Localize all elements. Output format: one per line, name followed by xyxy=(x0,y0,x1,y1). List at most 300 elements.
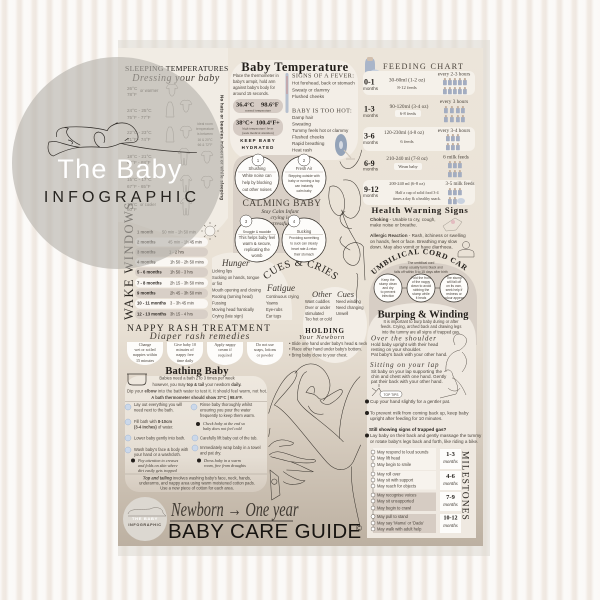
calming step 2: calm baby xyxy=(296,189,312,193)
temperature labels: 22°C - 23°C xyxy=(127,130,152,135)
umbilical circles: redness or xyxy=(446,292,463,296)
tips list: upright after feeding for 10 minutes. xyxy=(370,416,443,421)
calming step 1 xyxy=(235,154,279,200)
calming script note xyxy=(261,208,299,227)
tips list: Lay baby on their back and gently massage the tummy xyxy=(370,433,482,438)
fatigue cues xyxy=(266,283,299,318)
holding heading: HOLDING xyxy=(305,327,345,335)
row: 0-1 months: 8-12 feeds xyxy=(397,85,417,90)
bathing steps left: Pay attention to creases xyxy=(137,458,179,463)
high temperature pill: 38°C+ xyxy=(236,120,254,126)
temperature labels: 71°F - 74°F xyxy=(127,137,151,142)
umbilical circles: The stump xyxy=(446,276,462,280)
umbilical circles: Keep the xyxy=(381,278,395,282)
illustration: sleeping baby line drawing xyxy=(48,123,197,156)
milestone rows: May reach for objects xyxy=(377,484,416,488)
milestone rows: May sit with support xyxy=(377,478,414,482)
other cues: Need changing xyxy=(336,305,364,310)
logo badge: INFOGRAPHIC xyxy=(128,523,162,527)
wake window rows: 12 - 13 months xyxy=(137,312,167,316)
allergic reaction text: down. May also vomit or have diarrhoea. xyxy=(370,244,453,250)
nappy heading: NAPPY RASH TREATMENT xyxy=(127,323,271,334)
sleeping heading: SLEEPING TEMPERATURES xyxy=(125,64,229,73)
wake window rows: 1 month xyxy=(137,230,154,234)
temperature labels: 60°F xyxy=(127,207,137,212)
calming step 2: can instantly xyxy=(295,184,314,188)
bathing steps right: frequently to keep them warm. xyxy=(200,413,255,418)
milestone rows: May pull to stand xyxy=(377,514,409,519)
baby is too hot list: Sweating xyxy=(292,122,311,126)
nappy tip 3: required xyxy=(218,352,232,358)
icon: parent burping baby on shoulder xyxy=(446,334,466,372)
row: 3-6 months: every 3-4 hours xyxy=(438,128,470,134)
milestone rows: May recognise voices xyxy=(377,492,416,498)
wake window rows: 1 - 2 hrs xyxy=(169,250,184,254)
umbilical circles: seek help if xyxy=(446,288,462,292)
nappy tip 2: minutes of xyxy=(176,347,194,352)
newborn to one year script: Newborn → One year xyxy=(170,498,299,521)
umbilical circles: to prevent xyxy=(381,290,395,294)
baby is too hot list: Heat rash xyxy=(292,148,312,152)
icon: baby sitting on lap xyxy=(440,370,466,398)
row: 9-12 months: Half a cup of solid food 3-4 xyxy=(395,191,439,195)
panel: burping and winding xyxy=(365,303,482,538)
milestone month cards: 4-6 xyxy=(446,473,456,480)
panel: cues and cries xyxy=(212,252,367,363)
over the shoulder xyxy=(371,334,447,357)
bathing steps right: and pat dry. xyxy=(200,450,221,456)
calming heading: CALMING BABY xyxy=(242,199,322,209)
over the shoulder: Hold baby upright with their head xyxy=(371,342,439,347)
bathing steps right: ensuring you pour the water xyxy=(200,408,251,412)
panel: calming baby xyxy=(233,154,326,262)
hunger cues: Fussing xyxy=(212,300,227,306)
signs of a fever list: Sweaty or clammy xyxy=(292,88,330,92)
milestone rows: May walk with adult help xyxy=(377,526,422,532)
umbilical circles: of the nappy xyxy=(412,280,430,284)
wake window rows: 9 months xyxy=(137,290,156,296)
dressing script: Dressing your baby xyxy=(131,73,220,84)
thermometer instructions: Place the thermometer in xyxy=(233,73,279,78)
nappy tip 4 xyxy=(247,342,283,365)
row: 0-1 months: 30-60ml (1-2 oz) xyxy=(389,76,425,84)
bathing introduction: Babies need a bath 2 to 3 times per week xyxy=(159,376,236,380)
row: 3-6 months: months xyxy=(363,140,379,145)
calming step 4: Providing something xyxy=(289,236,319,240)
icon: baby choking xyxy=(443,218,462,231)
signs of a fever list: Flushed cheeks xyxy=(292,94,325,99)
fatigue cues: Yawns xyxy=(266,300,278,306)
wake window rows: 2h 15 - 3h 50 mins xyxy=(170,280,204,286)
calming step 2: Stepping outside with xyxy=(288,174,320,178)
calming step 2 xyxy=(282,154,326,200)
calming step 3: 3 xyxy=(245,219,248,224)
holding list: • Slide one hand under baby's head & neck. xyxy=(289,341,368,346)
calming step 4: Sucking xyxy=(297,229,312,234)
baby is too hot list: Tummy feels hot or clammy xyxy=(292,128,349,133)
milestone month cards: 10-12 xyxy=(444,516,458,522)
tips list: Cup your hand slightly for a gentler pat. xyxy=(370,399,450,404)
signs of a fever list xyxy=(292,72,355,99)
calming step 2: Fresh Air xyxy=(296,166,313,171)
row: 1-3 months: months xyxy=(363,113,379,118)
umbilical intro: The umbilical cord xyxy=(408,261,435,265)
row: 9-12 months: months xyxy=(363,193,379,198)
row: 1-3 months: 1-3 xyxy=(364,104,375,114)
choking text xyxy=(370,217,436,228)
panel: umbilical cord care xyxy=(369,249,477,345)
hunger cues: Licking lips xyxy=(212,268,232,274)
bathing steps right: Dress baby in a warm xyxy=(203,458,241,463)
icon: sun xyxy=(201,222,219,240)
bathing steps right: Rinse baby thoroughly whilst xyxy=(200,402,253,407)
keep baby hydrated: KEEP BABY xyxy=(240,138,276,143)
milestone month cards: months xyxy=(443,503,458,508)
holding list: • Bring baby close to your chest. xyxy=(289,352,348,358)
temperature labels: 18°C - 21°C xyxy=(127,154,152,159)
temperature labels: 67°F - 65°F xyxy=(127,184,151,189)
fatigue cues: Ear tugs xyxy=(266,314,281,318)
burping intro: feeds. Crying, arched back and drawing legs xyxy=(381,324,461,329)
milestone rows: May respond to loud sounds xyxy=(377,450,428,454)
panel: baby temperature xyxy=(230,60,358,160)
nappy tip 1: 15 minutes xyxy=(136,358,154,363)
temperature labels: 24°C - 25°C xyxy=(127,108,152,113)
hunger cues: Mouth opening and closing xyxy=(212,288,262,292)
wake window rows: 2h 45 - 3h 50 min xyxy=(170,290,203,296)
wake window rows: 7 - 8 months xyxy=(137,280,162,286)
bathing steps left: (3-4 inches) of water. xyxy=(134,424,173,430)
panel: nappy rash treatment xyxy=(127,323,283,365)
ideal room temperature note: ideal room xyxy=(197,122,213,126)
tips list xyxy=(365,399,482,444)
sitting on your lap: chin and chest with one hand. Gently xyxy=(371,374,447,379)
over the shoulder: Pat baby's back with your other hand. xyxy=(371,352,447,357)
wake window rows: 50 min - 1h 50 min xyxy=(162,230,197,234)
umbilical circles: odour appear xyxy=(444,296,465,300)
milestone month cards: months xyxy=(443,482,458,487)
burping heading: Burping & Winding xyxy=(378,310,469,320)
umbilical circles: and dry xyxy=(382,286,394,290)
wake window rows: 5 - 6 months xyxy=(137,270,162,274)
temperature labels: 64°F - 68°F xyxy=(127,160,151,165)
thermometer instructions: around 15 seconds. xyxy=(233,91,269,96)
choking text: Choking - Unable to cry, cough, xyxy=(370,217,436,222)
panel: wake windows xyxy=(122,201,219,320)
temperature labels: or cooler xyxy=(140,202,157,207)
umbilical circles: stump while xyxy=(412,292,430,296)
normal temperature pill xyxy=(233,99,283,113)
other cues: Need winding xyxy=(336,299,362,304)
wake window rows: 3h 15 - 4 hrs xyxy=(170,312,193,316)
wake window rows xyxy=(135,230,208,319)
wake window rows: 3 months xyxy=(137,250,156,254)
umbilical circles: on its own, xyxy=(446,284,462,288)
guide title xyxy=(168,498,362,543)
wake window rows: 10 - 11 months xyxy=(137,300,167,306)
milestone rows: May begin to smile xyxy=(377,462,412,467)
row: 9-12 months xyxy=(363,180,475,205)
bathing steps left xyxy=(125,402,189,473)
umbilical circles: will fall off xyxy=(447,280,461,284)
icon: doctor xyxy=(458,242,474,257)
ideal room temperature note: 66 & 72°F xyxy=(198,143,212,147)
icon: fan xyxy=(335,134,355,159)
thermometer instructions xyxy=(233,73,279,96)
bathing steps left: your hand or a washcloth. xyxy=(134,452,181,457)
row: 9-12 months: 200-240 ml (6-8 oz) xyxy=(389,181,425,186)
panel: sleeping temperatures xyxy=(118,48,229,238)
wake window rows: 4 months xyxy=(137,260,156,264)
baby is too hot list: BABY IS TOO HOT: xyxy=(292,108,352,114)
umbilical circles: Fold the front xyxy=(411,276,431,280)
burping intro xyxy=(381,319,461,334)
bathing introduction: Dip your elbow into the bath water to test it. It should feel warm, not hot. xyxy=(127,388,267,394)
top and tailing note: Top and tailing involves washing baby's face, neck, hands, xyxy=(143,476,251,480)
keep baby hydrated xyxy=(240,138,276,150)
bathing steps left: dirt easily gets trapped xyxy=(138,468,178,473)
nappy tip 3: cream if xyxy=(218,347,232,352)
bathing heading: Bathing Baby xyxy=(165,366,229,377)
temperature labels: 75°F - 77°F xyxy=(127,115,151,120)
milestone rows xyxy=(371,448,436,533)
temperature labels: 15°C - 17°C xyxy=(127,177,152,182)
calming step 4: heart rate & relax xyxy=(291,247,317,251)
normal temperature pill: normal temperature xyxy=(245,108,271,112)
top and tailing note: Use a new piece of cotton for each area. xyxy=(160,486,234,490)
overlay circle badge xyxy=(12,57,224,269)
baby is too hot list: Flushed cheeks xyxy=(292,134,325,140)
fatigue cues: Fatigue xyxy=(266,283,295,293)
other cues: Too hot or cold xyxy=(305,316,333,322)
panel: health warning signs xyxy=(370,205,474,257)
copyright mark: © xyxy=(356,524,362,533)
logo badge: THE BABY xyxy=(132,516,158,521)
panel: bathing baby xyxy=(125,366,267,492)
wake window rows: 2 months xyxy=(137,240,156,244)
row: 6-9 months: 6 milk feeds xyxy=(443,154,469,160)
allergic reaction text xyxy=(370,233,466,250)
baby is too hot list xyxy=(292,108,352,152)
calming step 3: womb xyxy=(252,253,263,258)
burping intro: It is important to burp baby during or after xyxy=(383,319,459,324)
bathing steps left: Fill bath with 8-10cm xyxy=(134,419,172,424)
nappy tip 1: Change xyxy=(139,342,151,347)
row: 0-1 months: months xyxy=(363,86,379,91)
milestone month cards: 7-9 xyxy=(446,494,456,501)
bathing steps left: and folds on skin where xyxy=(138,463,178,468)
wake window rows: 1h 50 - 2h 50 mins xyxy=(170,260,204,264)
nappy tip 1 xyxy=(127,342,163,365)
umbilical intro: stump usually turns black and xyxy=(399,266,443,270)
calming step 3: warm & secure, xyxy=(243,241,271,246)
bathing steps left: Lay out everything you will xyxy=(134,402,182,407)
calming step 1: 1 xyxy=(257,158,260,163)
temperature heading: Baby Temperature xyxy=(241,60,349,74)
baby is too hot list: Damp hair xyxy=(292,115,314,120)
umbilical circles: rubbing the xyxy=(413,288,429,292)
other cues: Over or under xyxy=(305,305,331,310)
illustration: line figure xyxy=(329,150,365,303)
other cues: stimulated xyxy=(305,311,324,316)
clothing icons xyxy=(166,84,213,215)
calming step 3 xyxy=(235,215,279,262)
vertical note: No hats or beanies indoors or while sleeping xyxy=(220,95,224,200)
choking text: make noise or breathe. xyxy=(370,222,417,228)
calming step 2: baby or running a tap xyxy=(288,179,320,183)
cues heading: CUES & CRIES xyxy=(264,260,338,279)
fatigue cues: Eye-rubs xyxy=(266,307,282,312)
high temperature pill: 100.4°F+ xyxy=(256,120,280,126)
nappy tip 3: Apply nappy xyxy=(214,342,237,347)
tips list: or rotate baby's legs back and forth, like riding a bike. xyxy=(370,439,478,444)
poster xyxy=(118,48,483,546)
bathing introduction: A bath thermometer should show 37°C | 98.6°F. xyxy=(151,395,243,400)
row: 1-3 months xyxy=(363,99,468,122)
calming step 1: White noise can xyxy=(242,173,272,178)
row: 6-9 months: months xyxy=(363,166,379,172)
nappy tip 2: Give baby 10 xyxy=(174,342,196,347)
calming step 2: 2 xyxy=(303,158,306,163)
wake window rows: 1h 50 - 3 hrs xyxy=(170,270,193,274)
bathing introduction: however, you may top & tail your newborn daily. xyxy=(153,382,241,387)
calming step 4: their stomach xyxy=(294,252,314,256)
over the shoulder: Over the shoulder xyxy=(371,334,437,342)
your newborn script: Your Newborn xyxy=(299,334,345,341)
nappy tip 2: time daily xyxy=(177,358,194,363)
top and tailing note: underarms, and nappy area using warm moistened cotton pads. xyxy=(139,480,255,486)
fatigue cues: Continuous crying xyxy=(266,294,299,299)
thermometer instructions: baby's armpit, hold arm xyxy=(233,79,276,84)
icon: bottle xyxy=(365,57,380,76)
hunger cues: Sucking on hands, tongue xyxy=(212,275,260,280)
nappy tip 1: wet or soiled xyxy=(134,347,156,352)
temperature labels: 26°C xyxy=(127,86,138,91)
bathing steps right: Immediately wrap baby in a towel xyxy=(200,445,261,450)
other cues: Cues xyxy=(337,289,355,299)
milestone month cards: months xyxy=(443,460,458,465)
tips list: To prevent milk from coming back up, keep baby xyxy=(370,410,469,416)
row: 3-6 months: 3-6 xyxy=(364,132,375,140)
top tips badge: TOP TIPS xyxy=(384,393,399,397)
other cues: Unwell xyxy=(336,311,348,316)
hunger cues: Moving head frantically xyxy=(212,307,255,312)
keep baby hydrated: HYDRATED xyxy=(242,145,274,150)
burping intro: into the tummy are all signs of trapped gas. xyxy=(382,330,460,334)
calming script note: Stay Calm Infant xyxy=(261,208,299,215)
signs of a fever list: Hot forehead, back or stomach xyxy=(292,80,355,86)
calming step 3: This helps baby feel xyxy=(239,235,275,240)
poster shadow xyxy=(118,40,490,556)
sitting on your lap: Sitting on your lap xyxy=(370,361,439,369)
infographic subtitle: INFOGRAPHIC xyxy=(44,189,200,206)
top tips badge xyxy=(372,384,402,398)
hunger cues: or fist xyxy=(212,281,223,286)
milestone rows: May roll over xyxy=(377,472,401,476)
row: 1-3 months: 6-8 feeds xyxy=(400,111,416,116)
calming script note: stressful xyxy=(271,220,290,227)
hunger cues: Hunger xyxy=(221,258,250,268)
bathing steps right: baby does not feel cold xyxy=(203,426,243,431)
logo badge xyxy=(123,497,167,541)
sitting on your lap xyxy=(370,361,447,384)
ideal room temperature note: 16 & 20°C xyxy=(197,138,213,142)
nappy tip 4: soaps, lotions xyxy=(254,347,277,353)
other cues: Other xyxy=(312,289,333,299)
panel: milestones xyxy=(371,448,470,533)
calming step 3: replicating the xyxy=(244,247,270,252)
temperature labels: 14°C xyxy=(127,202,138,207)
bathing introduction xyxy=(125,376,267,402)
row: 6-9 months: 6-9 xyxy=(364,159,375,168)
row: 0-1 months: every 2-3 hours xyxy=(438,72,470,78)
row: 3-6 months xyxy=(363,127,475,151)
the baby title: The Baby xyxy=(57,154,183,184)
feeding heading: FEEDING CHART xyxy=(383,62,464,71)
illustration: parent holding baby xyxy=(269,364,361,527)
health heading: Health Warning Signs xyxy=(372,205,468,215)
temperature labels: or warmer xyxy=(140,88,159,93)
tips list: Still showing signs of trapped gas? xyxy=(369,427,447,432)
ideal room temperature note xyxy=(196,122,214,147)
icon: bath xyxy=(127,374,147,385)
bathing steps right xyxy=(191,402,261,469)
other cues xyxy=(305,289,364,322)
milestone month cards: 1-3 xyxy=(446,451,456,458)
row: 6-9 months: Wean baby xyxy=(398,164,419,169)
allergic reaction text: Allergic Reaction - Rash, itchiness or swelling xyxy=(370,233,466,238)
nappy tip 1: nappies within xyxy=(133,352,157,357)
calming step 1: Shushing xyxy=(248,166,266,171)
row: 0-1 months xyxy=(363,71,475,95)
milestone month cards: months xyxy=(443,524,458,529)
row: 0-1 months: 0-1 xyxy=(364,78,375,86)
umbilical circles: down to avoid xyxy=(411,284,431,288)
calming step 4 xyxy=(282,215,326,262)
milestone rows: May begin to crawl xyxy=(377,506,411,510)
nappy tip 2 xyxy=(167,342,203,365)
wake window rows: 3 - 3h 45 min xyxy=(170,300,195,306)
calming step 1: out other noises xyxy=(242,187,272,192)
milestone month cards xyxy=(440,449,461,533)
high temperature pill xyxy=(233,118,283,136)
ideal room temperature note: is between xyxy=(197,132,213,136)
nappy tip 4: Do not use xyxy=(256,342,274,347)
umbilical circles: stump clean xyxy=(379,282,397,286)
hunger cues: Crying (late sign) xyxy=(212,314,244,318)
calming step 1: help by blocking xyxy=(242,180,272,185)
normal temperature pill: 98.6°F xyxy=(261,102,279,108)
bathing steps left: Wash baby's face & body with xyxy=(134,447,189,452)
row: 6-9 months: 210-240 ml (7-8 oz) xyxy=(386,155,428,162)
bathing steps right: room, free from draughts xyxy=(204,463,246,469)
panel: holding your newborn xyxy=(289,327,368,358)
nappy tip 3 xyxy=(207,342,243,365)
milestone rows: May sit unsupported xyxy=(377,498,415,504)
row: 9-12 months: 3-5 milk feeds xyxy=(446,182,474,187)
umbilical intro xyxy=(394,261,448,274)
umbilical intro: falls off within 5 to 15 days after birth xyxy=(394,270,448,274)
high temperature pill: high temperature/ fever xyxy=(243,126,274,130)
row: 1-3 months: 90-120ml (3-4 oz) xyxy=(390,103,429,110)
panel: feeding chart xyxy=(363,57,475,205)
ideal room temperature note: temperature xyxy=(196,127,214,131)
row: 9-12 months: times a day & a healthy snack. xyxy=(393,197,441,201)
hunger cues xyxy=(212,258,262,318)
row: 6-9 months xyxy=(363,154,469,177)
row: 9-12 months: 9-12 xyxy=(364,185,379,194)
over the shoulder: resting on your shoulder. xyxy=(371,347,421,352)
